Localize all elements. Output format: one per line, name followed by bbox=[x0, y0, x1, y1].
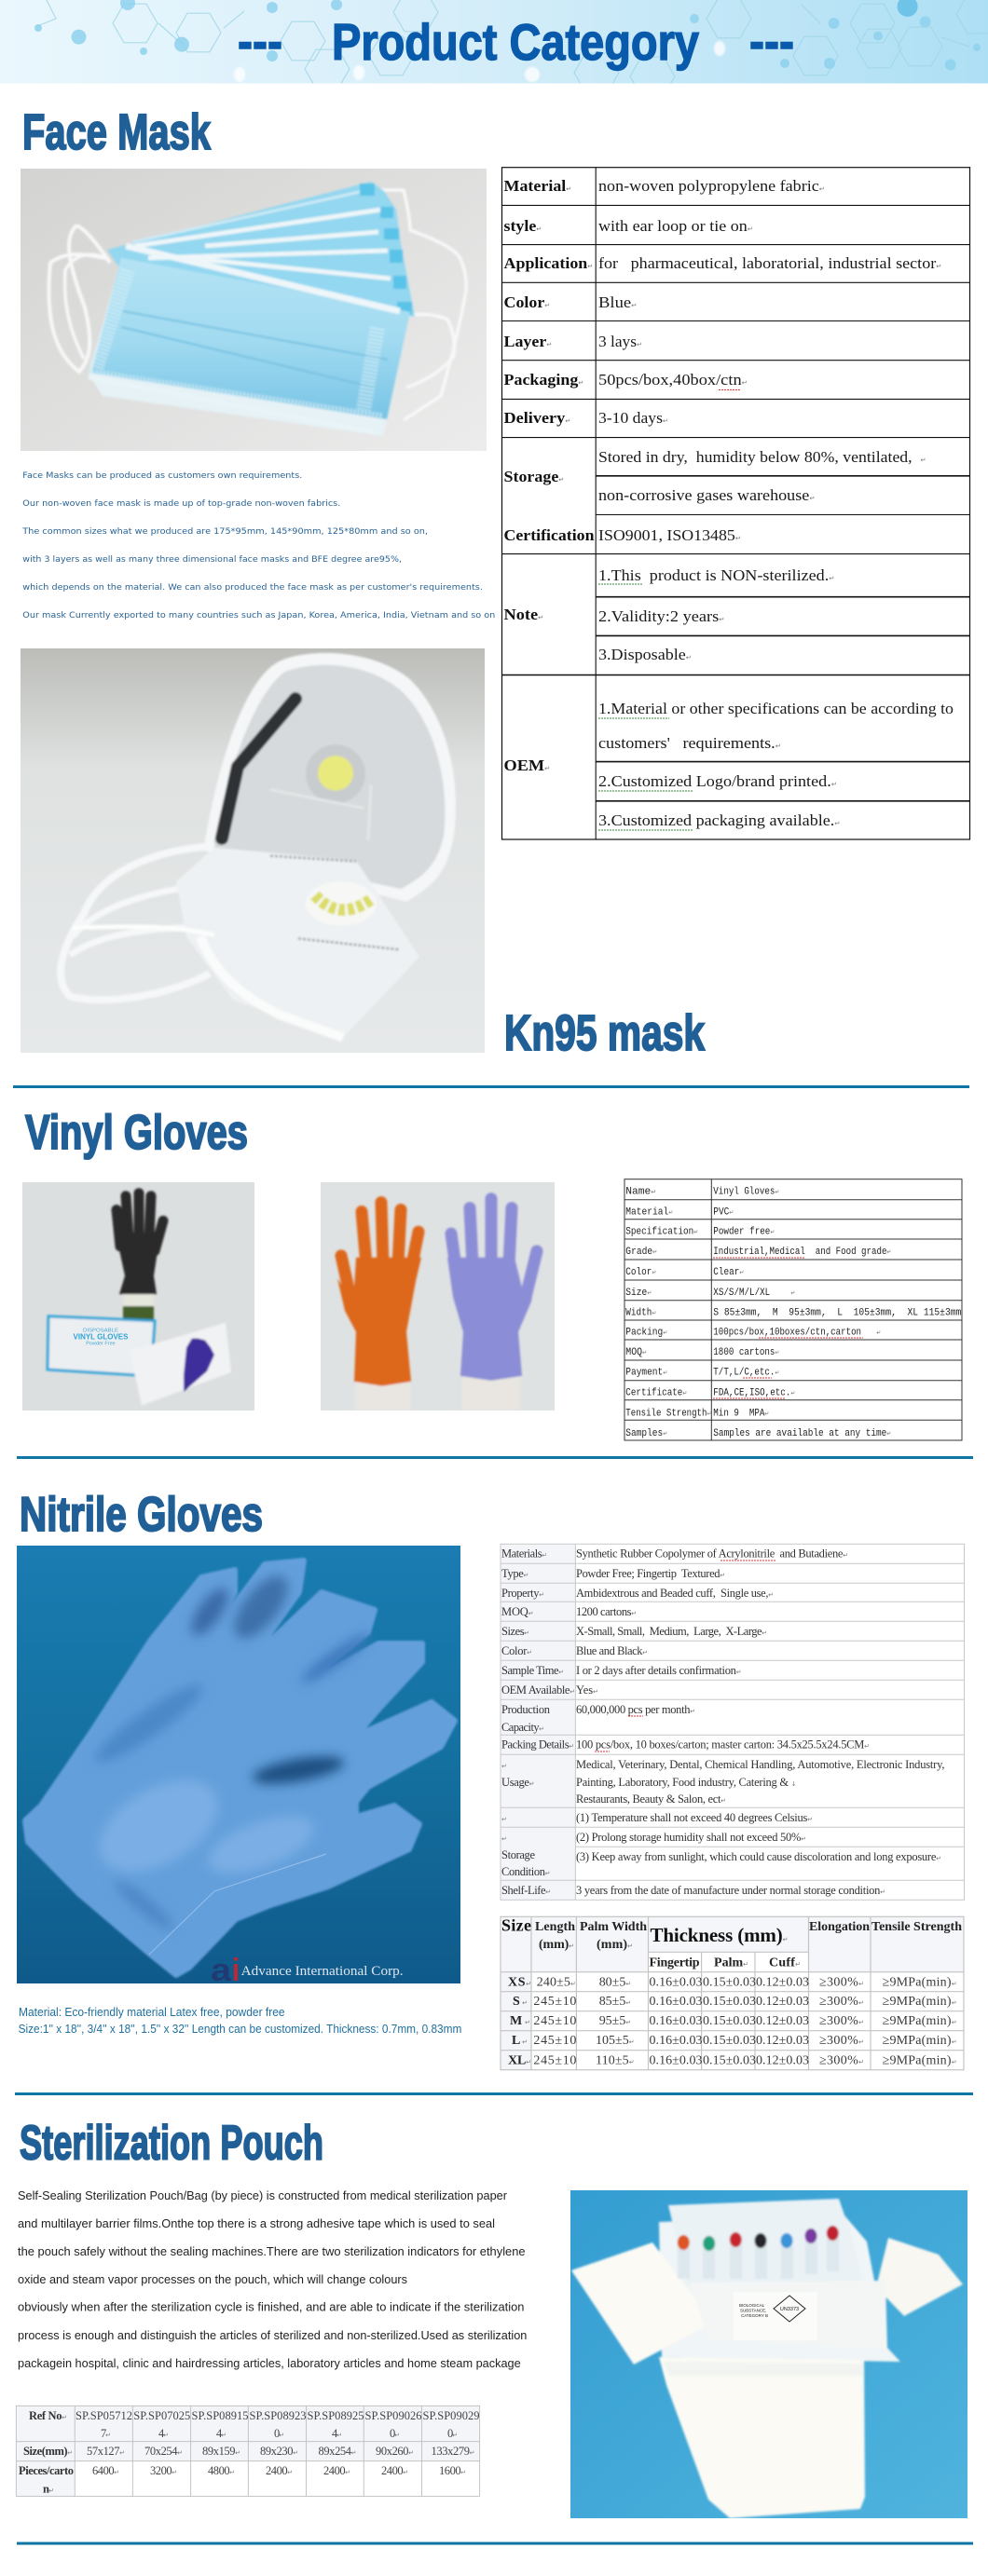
table: nitrile gloves specifications: Sizes↵ bbox=[501, 1625, 529, 1638]
logo: Advance International Corp. bbox=[212, 1957, 403, 1981]
table: face mask specifications: Color ↵ bbox=[503, 293, 550, 311]
photo: blue face masks bbox=[21, 169, 487, 451]
table: face mask specifications: 50pcs/box,40box/ctn ↵ bbox=[598, 371, 748, 388]
table: face mask specifications: style ↵ bbox=[503, 217, 542, 235]
text block: sterilization pouch description: packagein hospital, clinic and hairdressing articles, laboratory articles and home steam package bbox=[18, 2356, 521, 2370]
table: nitrile gloves specifications: Yes↵ bbox=[576, 1683, 598, 1697]
table: nitrile gloves sizes: ≥9MPa(min)↵ bbox=[883, 2034, 957, 2048]
table: nitrile gloves specifications: Restaurants, Beauty & Salon, ect↵ bbox=[576, 1792, 726, 1806]
pouch label: UN3373 bbox=[780, 2307, 799, 2312]
table: vinyl gloves specifications: Grade↵ bbox=[625, 1247, 657, 1258]
table: sterilization pouch reference numbers: 70x254↵ bbox=[144, 2445, 183, 2458]
text block: face mask description: The common sizes what we produced are 175*95mm, 145*90mm, 125*80mm and so on, bbox=[21, 527, 428, 537]
table: vinyl gloves specifications: XS/S/M/L/XL ↵ bbox=[713, 1288, 795, 1299]
table: face mask specifications: Layer ↵ bbox=[503, 333, 552, 350]
heading: Face Mask: Face Mask bbox=[22, 104, 212, 160]
table: nitrile gloves sizes: 245±10 bbox=[533, 2034, 576, 2048]
table: sterilization pouch reference numbers: 2400↵ bbox=[266, 2464, 293, 2477]
table: nitrile gloves specifications: OEM Available↵ bbox=[501, 1683, 575, 1697]
table: face mask specifications: 1.Material or other specifications can be according to bbox=[598, 700, 954, 717]
table: nitrile gloves specifications: (2) Prolong storage humidity shall not exceed 50%↵ bbox=[576, 1831, 806, 1844]
table: vinyl gloves specifications: Name↵ bbox=[625, 1187, 656, 1198]
logo: Advance International Corp.: a bbox=[211, 1953, 232, 1988]
table: nitrile gloves sizes: ≥300%↵ bbox=[819, 1995, 864, 2009]
logo: Advance International Corp.: Advance International Corp. bbox=[241, 1964, 404, 1979]
table: nitrile gloves specifications: 3 years from the date of manufacture under normal storage condition↵ bbox=[576, 1884, 885, 1897]
text block: sterilization pouch description: obviously when after the sterilization cycle is finished, and are able to indicate if the sterilization bbox=[18, 2299, 524, 2314]
text block: sterilization pouch description: process is enough and distinguish the articles of sterilized and non-sterilized.Used as sterilization bbox=[18, 2328, 527, 2342]
table: sterilization pouch reference numbers: 0↵ bbox=[447, 2427, 458, 2440]
table: nitrile gloves specifications: Sample Time↵ bbox=[501, 1664, 564, 1677]
table: sterilization pouch reference numbers: 4↵ bbox=[216, 2427, 226, 2440]
table: sterilization pouch reference numbers: 4↵ bbox=[158, 2427, 169, 2440]
text block: sterilization pouch description: the pouch safely without the sealing machines.There are two sterilization indicators for ethylene bbox=[18, 2244, 526, 2258]
table: vinyl gloves specifications: Min 9 MPA↵ bbox=[713, 1408, 769, 1419]
table: nitrile gloves sizes: Size bbox=[501, 1915, 531, 1934]
table: nitrile gloves sizes: M ↵ bbox=[510, 2014, 530, 2028]
table: nitrile gloves sizes: 0.15±0.03 bbox=[703, 2034, 756, 2048]
table: face mask specifications: Packaging ↵ bbox=[503, 371, 583, 388]
table: nitrile gloves sizes: 0.16±0.03 bbox=[649, 2053, 703, 2068]
table: nitrile gloves sizes: 0.12±0.03 bbox=[756, 1995, 809, 2009]
table: face mask specifications: Blue ↵ bbox=[598, 293, 638, 311]
pouch label bbox=[734, 2296, 806, 2340]
table: nitrile gloves specifications: Ambidextrous and Beaded cuff, Single use,↵ bbox=[576, 1587, 774, 1600]
table: sterilization pouch reference numbers: 1600↵ bbox=[439, 2464, 466, 2477]
table: sterilization pouch reference numbers: 6400↵ bbox=[92, 2464, 119, 2477]
table: sterilization pouch reference numbers: 7↵ bbox=[101, 2427, 111, 2440]
table: face mask specifications: Application ↵ bbox=[503, 254, 593, 272]
table: nitrile gloves sizes: Cuff↵ bbox=[769, 1956, 801, 1969]
table: nitrile gloves sizes: XS↵ bbox=[508, 1975, 531, 1990]
table: nitrile gloves specifications: 100 pcs/box, 10 boxes/carton; master carton: 34.5x25.5x24.5CM↵ bbox=[576, 1738, 870, 1751]
table: face mask specifications: 3.Disposable ↵ bbox=[598, 646, 692, 663]
table: vinyl gloves specifications: 1800 cartons↵ bbox=[713, 1347, 779, 1358]
table: sterilization pouch reference numbers: 2400↵ bbox=[323, 2464, 350, 2477]
table: vinyl gloves specifications: Industrial,Medical and Food grade↵ bbox=[713, 1247, 891, 1258]
table: nitrile gloves specifications: ↵ bbox=[501, 1816, 507, 1823]
table: nitrile gloves sizes: Thickness (mm)↵ bbox=[651, 1924, 789, 1946]
table: sterilization pouch reference numbers: 3200↵ bbox=[150, 2464, 177, 2477]
divider bbox=[17, 1456, 973, 1459]
table: nitrile gloves sizes: 0.12±0.03 bbox=[756, 1975, 809, 1990]
table: sterilization pouch reference numbers: SP.SP09026 bbox=[365, 2409, 421, 2422]
table: nitrile gloves specifications: 1200 cartons↵ bbox=[576, 1605, 637, 1618]
table: vinyl gloves specifications: Powder free↵ bbox=[713, 1227, 775, 1238]
photo: black vinyl glove with boxes: VINYL GLOVES bbox=[74, 1333, 128, 1341]
logo: Advance International Corp.: i bbox=[232, 1953, 240, 1988]
table: nitrile gloves sizes: ≥300%↵ bbox=[819, 2014, 864, 2028]
table: nitrile gloves specifications: 60,000,000 pcs per month↵ bbox=[576, 1703, 695, 1716]
table: nitrile gloves sizes: 0.16±0.03 bbox=[649, 1975, 703, 1990]
table: nitrile gloves sizes: ≥300%↵ bbox=[819, 2053, 864, 2068]
table: nitrile gloves sizes: 105±5↵ bbox=[596, 2034, 635, 2048]
table: sterilization pouch reference numbers: 133x279↵ bbox=[431, 2445, 475, 2458]
table: nitrile gloves sizes: 245±10 bbox=[533, 1995, 576, 2009]
text block: face mask description: with 3 layers as well as many three dimensional face masks and BFE degree are95%, bbox=[22, 555, 402, 565]
table: nitrile gloves sizes: 0.15±0.03 bbox=[703, 2053, 756, 2068]
table: nitrile gloves sizes: Palm↵ bbox=[714, 1956, 748, 1969]
table: nitrile gloves specifications: Shelf-Life↵ bbox=[501, 1884, 551, 1897]
table: face mask specifications: 2.Validity:2 years ↵ bbox=[598, 607, 725, 625]
banner title: --- bbox=[238, 12, 282, 70]
text block: sterilization pouch description bbox=[18, 2188, 527, 2370]
table: nitrile gloves sizes: 0.16±0.03 bbox=[649, 2034, 703, 2048]
photo: blue nitrile glove bbox=[17, 1546, 460, 1988]
heading: Vinyl Gloves: Vinyl Gloves bbox=[25, 1106, 248, 1160]
table: nitrile gloves specifications: Blue and Black↵ bbox=[576, 1644, 648, 1657]
divider bbox=[15, 2092, 973, 2095]
table: nitrile gloves sizes: S ↵ bbox=[513, 1995, 528, 2009]
table: nitrile gloves sizes: Elongation bbox=[809, 1920, 870, 1934]
pouch label: CATEGORY B bbox=[741, 2313, 768, 2318]
table: face mask specifications: Storage ↵ bbox=[503, 468, 565, 485]
table: vinyl gloves specifications: 100pcs/box,10boxes/ctn,carton ↵ bbox=[713, 1327, 881, 1338]
text block: sterilization pouch description: Self-Sealing Sterilization Pouch/Bag (by piece) is constructed from medical sterilization paper bbox=[18, 2188, 508, 2202]
table: face mask specifications bbox=[501, 168, 969, 839]
table: face mask specifications: 3.Customized packaging available. ↵ bbox=[598, 811, 841, 829]
table: nitrile gloves specifications: ↵ bbox=[501, 1835, 507, 1843]
table: nitrile gloves sizes: ≥9MPa(min)↵ bbox=[883, 2053, 957, 2068]
table: nitrile gloves sizes: 0.16±0.03 bbox=[649, 2014, 703, 2028]
table: sterilization pouch reference numbers: 4800↵ bbox=[208, 2464, 235, 2477]
table: nitrile gloves specifications: Property↵ bbox=[501, 1587, 544, 1600]
pouch label: BIOLOGICAL bbox=[739, 2303, 765, 2308]
table: face mask specifications: Certification bbox=[503, 526, 595, 544]
table: nitrile gloves specifications: (3) Keep away from sunlight, which could cause discoloration and long exposure↵ bbox=[576, 1850, 941, 1863]
table: sterilization pouch reference numbers: 2400↵ bbox=[381, 2464, 408, 2477]
table: sterilization pouch reference numbers: 89x159↵ bbox=[202, 2445, 240, 2458]
table: sterilization pouch reference numbers: n↵ bbox=[43, 2482, 54, 2495]
text block: face mask description bbox=[21, 471, 495, 620]
photo: sterilization pouches and tubes bbox=[570, 2190, 967, 2518]
table: nitrile gloves sizes: L ↵ bbox=[512, 2034, 528, 2048]
table: face mask specifications: ISO9001, ISO13485 ↵ bbox=[598, 526, 741, 544]
table: nitrile gloves sizes: ≥300%↵ bbox=[819, 1975, 864, 1990]
table: nitrile gloves sizes: 85±5↵ bbox=[599, 1995, 631, 2009]
table: nitrile gloves specifications: Capacity↵ bbox=[501, 1721, 544, 1734]
photo: orange and purple gloves bbox=[321, 1182, 555, 1411]
table: sterilization pouch reference numbers: SP.SP08925 bbox=[308, 2409, 364, 2422]
table: sterilization pouch reference numbers: 89x230↵ bbox=[260, 2445, 298, 2458]
text block: nitrile material note: Size:1'' x 18'', 3/4'' x 18'', 1.5'' x 32'' Length can be customized. Thickness: 0.7mm, 0.83mm bbox=[19, 2023, 461, 2036]
heading: Kn95 mask: Kn95 mask bbox=[504, 1005, 706, 1061]
table: face mask specifications: non-corrosive gases warehouse ↵ bbox=[598, 486, 816, 504]
table: nitrile gloves sizes bbox=[501, 1915, 964, 2070]
table: face mask specifications: Note ↵ bbox=[503, 606, 544, 623]
table: nitrile gloves specifications: Synthetic Rubber Copolymer of Acrylonitrile and Butadiene↵ bbox=[576, 1547, 848, 1561]
table: vinyl gloves specifications: S 85±3mm, M 95±3mm, L 105±3mm, XL 115±3mm bbox=[713, 1307, 962, 1318]
table: nitrile gloves specifications: Condition↵ bbox=[501, 1865, 550, 1878]
table: nitrile gloves specifications: Type↵ bbox=[501, 1567, 528, 1580]
table: nitrile gloves specifications: Color↵ bbox=[501, 1644, 532, 1657]
table: vinyl gloves specifications: MOQ↵ bbox=[625, 1347, 647, 1358]
table: face mask specifications: customers' requirements. ↵ bbox=[598, 734, 781, 752]
table: nitrile gloves specifications: Production bbox=[501, 1703, 551, 1716]
heading: Sterilization Pouch: Sterilization Pouch bbox=[20, 2117, 323, 2171]
table: sterilization pouch reference numbers: SP.SP07025 bbox=[133, 2409, 190, 2422]
table: nitrile gloves specifications: Storage bbox=[501, 1848, 535, 1861]
photo: black vinyl glove with boxes bbox=[22, 1182, 254, 1411]
divider bbox=[17, 2542, 973, 2545]
table: vinyl gloves specifications: Payment↵ bbox=[625, 1368, 667, 1379]
table: sterilization pouch reference numbers bbox=[16, 2406, 480, 2496]
text block: nitrile material note: Material: Eco-friendly material Latex free, powder free bbox=[19, 2006, 285, 2019]
text block: sterilization pouch description: oxide and steam vapor processes on the pouch, which will change colours bbox=[18, 2272, 407, 2286]
table: vinyl gloves specifications: Tensile Strength↵ bbox=[625, 1408, 711, 1419]
divider bbox=[13, 1085, 969, 1088]
banner bbox=[0, 0, 988, 84]
table: nitrile gloves sizes: 0.12±0.03 bbox=[756, 2053, 809, 2068]
table: nitrile gloves specifications: (1) Temperature shall not exceed 40 degrees Celsius↵ bbox=[576, 1811, 813, 1824]
banner title: --- bbox=[749, 12, 794, 70]
table: face mask specifications: 3 lays↵ bbox=[598, 333, 642, 350]
table: face mask specifications: OEM ↵ bbox=[503, 756, 550, 774]
table: face mask specifications: Delivery ↵ bbox=[503, 409, 570, 427]
table: sterilization pouch reference numbers: Ref No↵ bbox=[29, 2409, 67, 2422]
photo: black vinyl glove with boxes: Powder Free bbox=[86, 1341, 116, 1346]
table: vinyl gloves specifications: Vinyl Gloves↵ bbox=[713, 1187, 779, 1198]
table: face mask specifications: non-woven polypropylene fabric ↵ bbox=[598, 177, 825, 195]
banner title: Product Category bbox=[332, 13, 699, 71]
text block: face mask description: Our mask Currently exported to many countries such as Japan, Korea, America, India, Vietnam and so on bbox=[22, 611, 495, 620]
table: nitrile gloves specifications bbox=[501, 1544, 964, 1900]
table: nitrile gloves sizes: 240±5↵ bbox=[537, 1975, 576, 1990]
table: vinyl gloves specifications: Samples↵ bbox=[625, 1428, 667, 1439]
table: vinyl gloves specifications: FDA,CE,ISO,etc.↵ bbox=[713, 1388, 795, 1399]
pouch label: SUBSTANCE, bbox=[740, 2309, 766, 2312]
table: nitrile gloves specifications: ↵ bbox=[501, 1763, 507, 1770]
table: vinyl gloves specifications: Packing↵ bbox=[625, 1327, 667, 1338]
table: vinyl gloves specifications: T/T,L/C,etc.↵ bbox=[713, 1368, 779, 1379]
table: nitrile gloves specifications: Usage↵ bbox=[501, 1776, 535, 1789]
table: sterilization pouch reference numbers: Size(mm)↵ bbox=[23, 2445, 73, 2458]
table: nitrile gloves sizes: 0.12±0.03 bbox=[756, 2014, 809, 2028]
table: vinyl gloves specifications: Width↵ bbox=[625, 1307, 656, 1318]
table: sterilization pouch reference numbers: 90x260↵ bbox=[376, 2445, 414, 2458]
table: vinyl gloves specifications bbox=[624, 1179, 962, 1440]
table: nitrile gloves sizes: ≥9MPa(min)↵ bbox=[883, 1975, 957, 1990]
table: sterilization pouch reference numbers: 89x254↵ bbox=[319, 2445, 356, 2458]
table: face mask specifications: 1.This product is NON-sterilized. ↵ bbox=[598, 566, 835, 584]
table: sterilization pouch reference numbers: 0↵ bbox=[390, 2427, 400, 2440]
table: face mask specifications: 2.Customized Logo/brand printed. ↵ bbox=[598, 772, 837, 790]
table: sterilization pouch reference numbers: SP.SP08915 bbox=[192, 2409, 248, 2422]
text block: nitrile material note bbox=[19, 2006, 461, 2036]
table: vinyl gloves specifications: Size↵ bbox=[625, 1288, 652, 1299]
table: nitrile gloves sizes: Tensile Strength bbox=[871, 1920, 962, 1934]
table: nitrile gloves specifications: Packing Details↵ bbox=[501, 1738, 574, 1751]
table: vinyl gloves specifications: Certificate↵ bbox=[625, 1388, 687, 1399]
table: face mask specifications: for pharmaceutical, laboratorial, industrial sector ↵ bbox=[598, 254, 941, 272]
photo: black vinyl glove with boxes: DISPOSABLE bbox=[83, 1329, 118, 1334]
table: vinyl gloves specifications: Specification↵ bbox=[625, 1227, 698, 1238]
table: face mask specifications: 3-10 days ↵ bbox=[598, 409, 668, 427]
table: nitrile gloves specifications: Powder Free; Fingertip Textured↵ bbox=[576, 1567, 725, 1580]
table: vinyl gloves specifications: Samples are available at any time↵ bbox=[713, 1428, 891, 1439]
table: nitrile gloves sizes: Length bbox=[535, 1920, 575, 1934]
table: nitrile gloves sizes: 80±5↵ bbox=[599, 1975, 631, 1990]
table: vinyl gloves specifications: Color↵ bbox=[625, 1267, 656, 1278]
table: nitrile gloves sizes: 0.12±0.03 bbox=[756, 2034, 809, 2048]
table: nitrile gloves sizes: Palm Width bbox=[580, 1920, 647, 1934]
table: nitrile gloves sizes: Fingertip bbox=[649, 1956, 700, 1969]
table: nitrile gloves sizes: 110±5↵ bbox=[596, 2053, 635, 2068]
table: sterilization pouch reference numbers: SP.SP05712 bbox=[75, 2409, 132, 2422]
table: sterilization pouch reference numbers: SP.SP09029 bbox=[423, 2409, 479, 2422]
table: nitrile gloves sizes: 0.15±0.03 bbox=[703, 1995, 756, 2009]
photo: KN95 masks bbox=[21, 648, 485, 1053]
table: nitrile gloves sizes: XL↵ bbox=[508, 2053, 531, 2068]
table: nitrile gloves sizes: (mm)↵ bbox=[597, 1938, 633, 1952]
table: nitrile gloves specifications: Painting, Laboratory, Food industry, Catering & ↓ bbox=[576, 1776, 797, 1789]
table: vinyl gloves specifications: Clear↵ bbox=[713, 1267, 744, 1278]
heading: Nitrile Gloves: Nitrile Gloves bbox=[20, 1488, 263, 1542]
table: nitrile gloves sizes: ≥300%↵ bbox=[819, 2034, 864, 2048]
table: sterilization pouch reference numbers: SP.SP08923 bbox=[250, 2409, 306, 2422]
table: nitrile gloves specifications: Materials↵ bbox=[501, 1547, 547, 1561]
table: sterilization pouch reference numbers: 0↵ bbox=[274, 2427, 284, 2440]
table: nitrile gloves specifications: X-Small, Small, Medium, Large, X-Large↵ bbox=[576, 1625, 767, 1638]
table: vinyl gloves specifications: Material↵ bbox=[625, 1207, 673, 1219]
text block: face mask description: Our non-woven face mask is made up of top-grade non-woven fabrics. bbox=[22, 499, 340, 509]
table: nitrile gloves sizes: 0.15±0.03 bbox=[703, 1975, 756, 1990]
table: nitrile gloves sizes: ≥9MPa(min)↵ bbox=[883, 1995, 957, 2009]
table: nitrile gloves sizes: 0.15±0.03 bbox=[703, 2014, 756, 2028]
table: nitrile gloves sizes: 245±10 bbox=[533, 2014, 576, 2028]
table: nitrile gloves sizes: (mm)↵ bbox=[539, 1938, 574, 1952]
table: sterilization pouch reference numbers: 4↵ bbox=[332, 2427, 342, 2440]
table: nitrile gloves sizes: ≥9MPa(min)↵ bbox=[883, 2014, 957, 2028]
table: nitrile gloves specifications: I or 2 days after details confirmation↵ bbox=[576, 1664, 742, 1677]
table: vinyl gloves specifications: PVC↵ bbox=[713, 1207, 734, 1219]
text block: face mask description: which depends on the material. We can also produced the face mask as per customer's requirements. bbox=[22, 583, 483, 593]
table: nitrile gloves sizes: 95±5↵ bbox=[599, 2014, 631, 2028]
table: face mask specifications: with ear loop or tie on ↵ bbox=[598, 217, 753, 235]
text block: face mask description: Face Masks can be produced as customers own requirements. bbox=[22, 471, 302, 481]
table: nitrile gloves specifications: Medical, Veterinary, Dental, Chemical Handling, Automotive, Electronic Industry, bbox=[576, 1758, 945, 1771]
table: nitrile gloves sizes: 0.16±0.03 bbox=[649, 1995, 703, 2009]
table: nitrile gloves specifications: MOQ↵ bbox=[501, 1605, 533, 1618]
table: sterilization pouch reference numbers: Pieces/carto bbox=[19, 2464, 74, 2477]
table: face mask specifications: Stored in dry, humidity below 80%, ventilated, ↵ bbox=[598, 448, 926, 466]
table: face mask specifications: Material ↵ bbox=[503, 177, 572, 195]
text block: sterilization pouch description: and multilayer barrier films.Onthe top there is a strong adhesive tape which is used to seal bbox=[18, 2216, 495, 2230]
table: nitrile gloves sizes: 245±10 bbox=[533, 2053, 576, 2068]
table: sterilization pouch reference numbers: 57x127↵ bbox=[87, 2445, 125, 2458]
